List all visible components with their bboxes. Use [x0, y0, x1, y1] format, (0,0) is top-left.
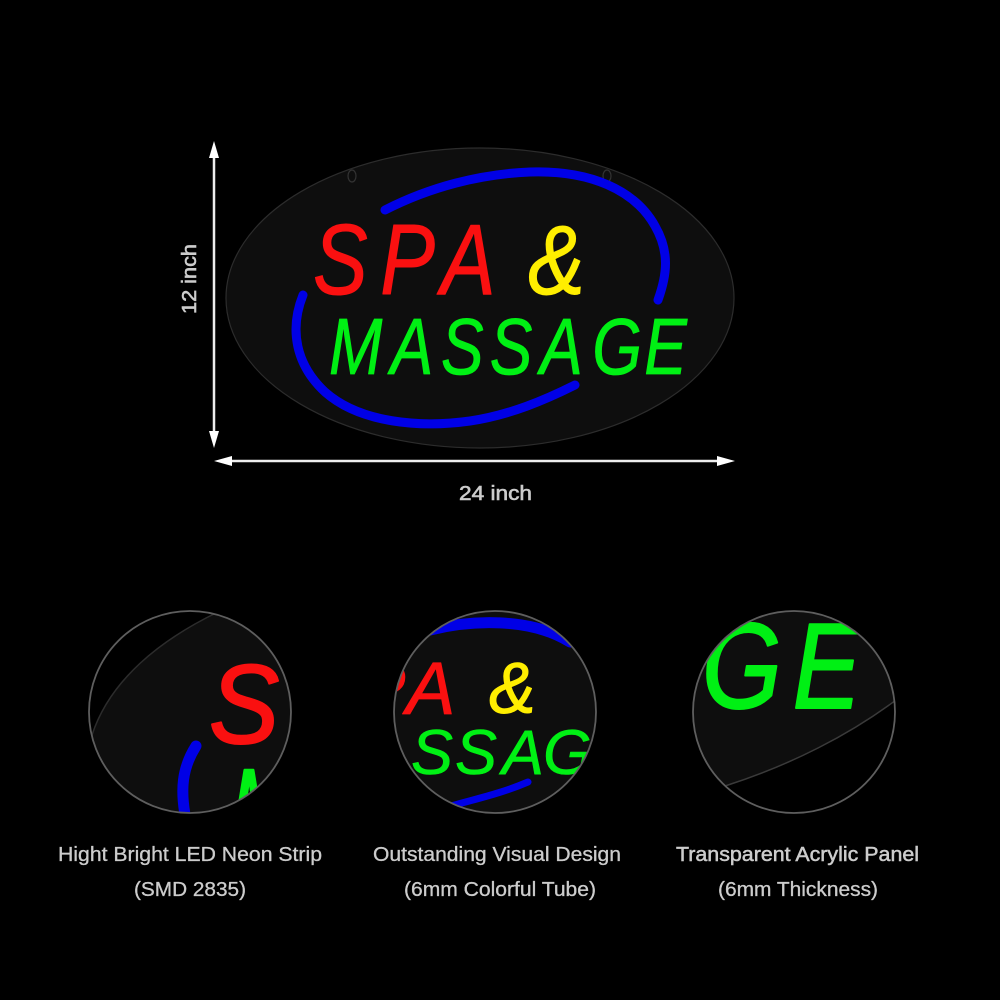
neon text: MASSAGE: MASSAGE	[329, 302, 687, 392]
dimension label: 24 inch: 24 inch	[459, 483, 532, 505]
magnified view: A, ampersand, SSAG: PA	[356, 647, 455, 730]
caption: visual design: (6mm Colorful Tube)	[404, 879, 596, 901]
blue lower neon arc	[296, 295, 575, 424]
magnified view: S and blue arc: S	[209, 643, 279, 768]
magnified view: A, ampersand, SSAG	[395, 612, 595, 812]
panel: LED strip detail circle	[88, 610, 292, 814]
circle outline	[89, 611, 291, 813]
dimension label: 12 inch: 12 inch	[179, 244, 201, 314]
arrow: width dimension	[214, 456, 735, 466]
circle outline	[394, 611, 596, 813]
caption: LED strip	[58, 844, 322, 901]
neon text: SPA: SPA	[313, 204, 496, 316]
magnified view: GE and panel edge: GE	[702, 598, 863, 734]
caption: acrylic panel: Transparent Acrylic Panel	[676, 844, 919, 866]
acrylic oval panel	[226, 148, 734, 448]
blue upper neon arc	[385, 172, 666, 300]
caption: visual design	[373, 844, 621, 901]
panel: acrylic panel detail circle	[692, 610, 896, 814]
caption: LED strip: Hight Bright LED Neon Strip	[58, 844, 322, 866]
caption: visual design: Outstanding Visual Design	[373, 844, 621, 866]
magnified view: GE and panel edge	[694, 612, 894, 786]
caption: LED strip: (SMD 2835)	[134, 879, 246, 901]
neon text: ampersand: &	[528, 207, 585, 315]
caption: acrylic panel: (6mm Thickness)	[718, 879, 878, 901]
magnified view: A, ampersand, SSAG: &	[489, 649, 536, 729]
magnified view: S and blue arc	[92, 614, 290, 812]
panel: oval neon sign	[226, 148, 734, 448]
panel: visual design detail circle	[393, 610, 597, 814]
magnified view: A, ampersand, SSAG: SSAG	[411, 718, 592, 788]
icon: left mounting hole	[348, 170, 356, 182]
magnified view: S and blue arc: M	[232, 750, 296, 851]
arrow: height dimension	[209, 141, 219, 448]
circle outline	[693, 611, 895, 813]
icon: right mounting hole	[603, 170, 611, 182]
caption: acrylic panel	[676, 844, 919, 901]
